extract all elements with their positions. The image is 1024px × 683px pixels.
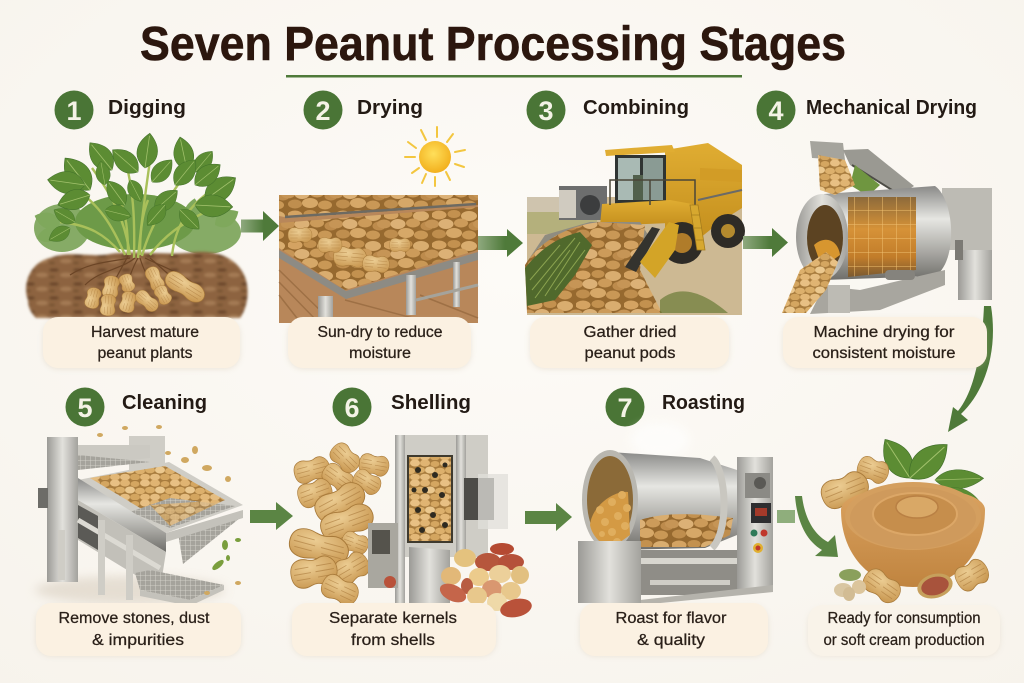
caption: combining: peanut pods xyxy=(584,345,676,362)
step 7 heading: 7 xyxy=(617,393,633,423)
arrow: digging to drying xyxy=(241,211,279,241)
caption: digging xyxy=(43,317,240,369)
caption: cleaning: Remove stones, dust xyxy=(58,610,210,627)
caption: shelling xyxy=(292,603,496,656)
caption: digging: peanut plants xyxy=(98,345,193,362)
arrow: combining to mechanical drying xyxy=(743,228,788,257)
step 2 heading: 2 xyxy=(315,96,331,126)
illustration: mechanical drum dryer xyxy=(782,141,992,314)
step 3 heading: 3 xyxy=(538,96,554,126)
title: Seven Peanut Processing Stages xyxy=(140,18,846,71)
caption: roasting: & quality xyxy=(637,632,705,649)
step 2 heading: Drying xyxy=(357,97,423,119)
illustration: sheller with peanuts xyxy=(286,435,534,620)
caption: drying: moisture xyxy=(349,345,411,362)
step 4 heading: Mechanical Drying xyxy=(806,97,977,119)
step 3 heading: Combining xyxy=(583,97,689,119)
caption: final product: Ready for consumption xyxy=(828,610,980,627)
illustration: peanut butter bowl xyxy=(817,433,993,607)
arrow: drying to combining xyxy=(478,229,523,257)
step 6 heading xyxy=(332,388,471,426)
step 7 heading xyxy=(606,388,745,426)
step 5 heading: 5 xyxy=(77,393,93,423)
step 1 heading xyxy=(54,90,186,130)
caption: cleaning xyxy=(36,603,241,656)
illustration: combine harvester xyxy=(525,143,745,315)
step 1 heading: 1 xyxy=(66,96,82,126)
illustration: vibrating cleaner xyxy=(35,425,243,606)
step 3 heading xyxy=(526,90,689,130)
caption: shelling: Separate kernels xyxy=(329,610,457,627)
title underline xyxy=(286,75,742,78)
arrow: curve into bowl xyxy=(795,496,838,557)
step 6 heading: 6 xyxy=(344,393,360,423)
caption: cleaning: & impurities xyxy=(92,632,184,649)
arrow: shelling to roasting xyxy=(525,503,572,531)
step 4 heading: 4 xyxy=(768,96,784,126)
step 7 heading: Roasting xyxy=(662,392,745,414)
caption: final product xyxy=(808,605,1000,656)
caption: digging: Harvest mature xyxy=(91,324,199,341)
illustration: sun xyxy=(405,127,465,186)
step 6 heading: Shelling xyxy=(391,392,471,414)
caption: mechanical drying xyxy=(783,317,987,369)
caption: drying xyxy=(288,317,471,369)
arrow: roasting to bowl xyxy=(777,510,795,523)
illustration: drying racks xyxy=(279,195,478,323)
step 1 heading: Digging xyxy=(108,97,186,119)
caption: drying: Sun-dry to reduce xyxy=(318,324,442,341)
caption: combining: Gather dried xyxy=(584,324,676,341)
caption: mechanical drying: consistent moisture xyxy=(812,345,956,362)
caption: combining xyxy=(530,317,729,369)
illustration: peanut plant in soil xyxy=(26,132,248,318)
arrow: mechanical drying curve to bowl xyxy=(948,306,993,432)
caption: shelling: from shells xyxy=(351,632,435,649)
caption: mechanical drying: Machine drying for xyxy=(814,324,954,341)
step 4 heading xyxy=(756,90,977,130)
caption: roasting xyxy=(580,603,768,656)
step 5 heading: Cleaning xyxy=(122,392,207,414)
caption: roasting: Roast for flavor xyxy=(616,610,726,627)
illustration: roaster drum xyxy=(578,422,773,605)
step 5 heading xyxy=(66,388,207,426)
caption: final product: or soft cream production xyxy=(824,632,984,649)
arrow: cleaning to shelling xyxy=(250,502,293,530)
step 2 heading xyxy=(304,90,423,130)
